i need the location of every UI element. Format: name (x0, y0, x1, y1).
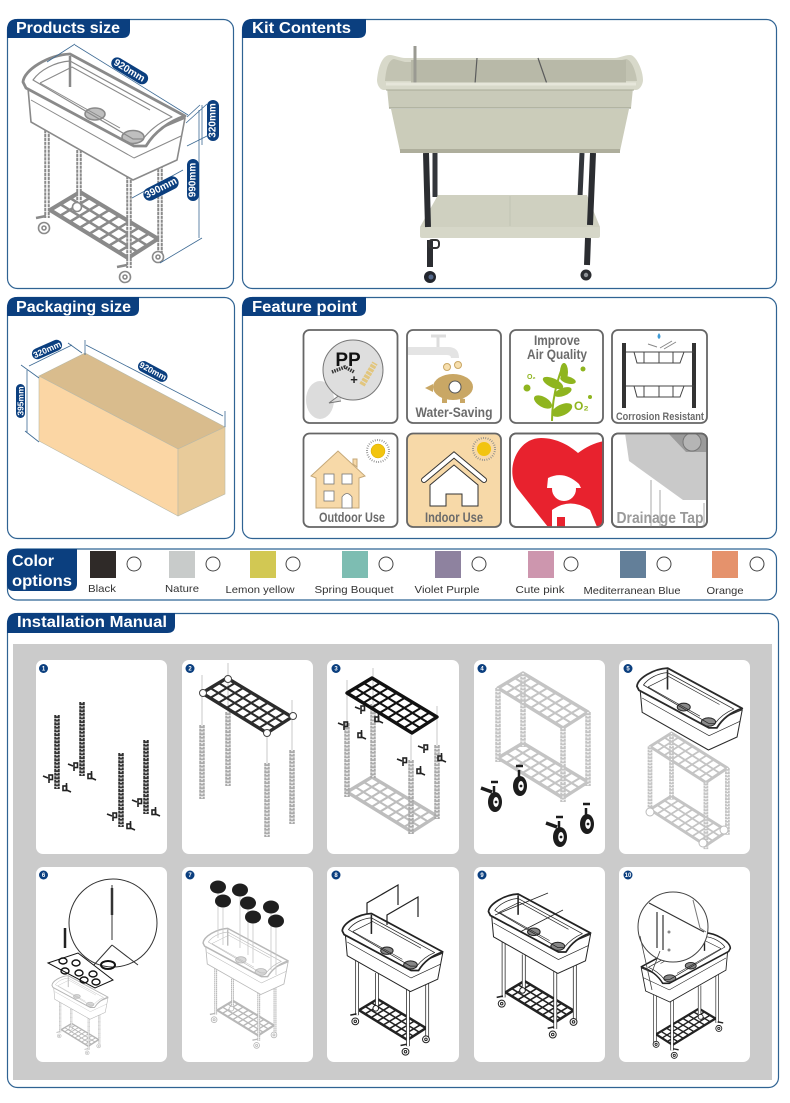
swatch: black (88, 551, 141, 595)
feature icon: PP material (304, 330, 398, 423)
step 2: shelf onto posts (182, 660, 313, 854)
feature icon: heart and gardener (510, 434, 604, 527)
step 1: four posts: 1 (42, 666, 46, 672)
swatch: mediterranean blue: Mediterranean Blue (584, 585, 681, 597)
step 6: gasket sheet (36, 867, 170, 1062)
dimension: 320mm: 320mm (208, 103, 218, 138)
step 5: tub onto rack (619, 660, 750, 854)
swatch: black: Black (88, 583, 117, 595)
step 10: drainage tap detail: 10 (625, 873, 632, 879)
step 8: divider bars (327, 867, 459, 1062)
swatch: orange (706, 551, 764, 597)
magnifier (638, 892, 708, 990)
dimension: 320mm: 320mm (32, 339, 63, 360)
feature icon: corrosion resistant (612, 330, 707, 423)
photo: front legs and wheels (424, 153, 593, 283)
swatch: orange: Orange (706, 585, 744, 597)
step 2: shelf onto posts: 2 (188, 666, 192, 672)
swatch: spring bouquet (314, 551, 394, 596)
heading: products size: Products size (16, 20, 120, 37)
step 3: clips and top shelf: 3 (334, 666, 338, 672)
feature icon: outdoor use (304, 434, 398, 527)
dimension: 920mm: 920mm (138, 360, 169, 382)
step 9: assembled cart (474, 867, 605, 1062)
feature icon: corrosion resistant: Corrosion Resistant (616, 411, 704, 423)
carton box (39, 353, 225, 516)
step 4: attach casters: 4 (480, 666, 484, 672)
dimension: 990mm (160, 110, 202, 263)
feature icon: drainage tap (612, 433, 707, 527)
swatch: cute pink: Cute pink (516, 584, 565, 596)
feature icon: indoor use: Indoor Use (425, 509, 483, 525)
swatch: violet purple (414, 551, 486, 596)
panel: installation manual (7, 613, 778, 1088)
heading: color options: Color (12, 553, 54, 570)
feature icon: PP material: + (350, 372, 358, 387)
dimension: 920mm (85, 340, 225, 427)
dimension: 395mm: 395mm (16, 386, 26, 416)
heading: feature point: Feature point (252, 299, 357, 316)
feature icon: drainage tap: Drainage Tap (616, 510, 704, 527)
feature icon: water saving (407, 330, 501, 423)
feature icon: improve air quality: Improve (534, 332, 580, 348)
step 6: gasket sheet: 6 (42, 873, 46, 879)
step 3: clips and top shelf (327, 660, 459, 854)
swatch: lemon yellow (226, 551, 300, 596)
swatch: cute pink (516, 551, 578, 596)
heading: color options (7, 549, 77, 591)
swatch: violet purple: Violet Purple (414, 584, 480, 596)
feature icon: outdoor use: Outdoor Use (319, 509, 385, 525)
dimension: 920mm: 920mm (111, 57, 147, 85)
product photo: grey planter cart (377, 46, 643, 283)
swatch: lemon yellow: Lemon yellow (226, 584, 295, 596)
dimension: 320mm (186, 100, 219, 146)
step 9: assembled cart: 9 (480, 873, 484, 879)
dimension: 320mm (21, 338, 82, 378)
feature icon: improve air quality (510, 330, 603, 423)
heading: color options: options (12, 573, 72, 590)
panel: feature point (242, 297, 776, 538)
step 5: tub onto rack: 5 (626, 666, 630, 672)
magnifier (68, 878, 158, 970)
feature icon: indoor use (407, 434, 501, 527)
swatch: spring bouquet: Spring Bouquet (314, 584, 394, 596)
step 7: pots: 7 (188, 873, 192, 879)
feature icon: PP material: PP (335, 350, 361, 371)
heading: kit contents (242, 19, 366, 38)
panel: packaging size (7, 297, 234, 538)
feature icon: water saving: Water-Saving (416, 404, 492, 420)
heading: installation manual: Installation Manual (17, 614, 167, 631)
heading: packaging size: Packaging size (16, 299, 131, 316)
feature icon: improve air quality: O₂ (574, 399, 589, 413)
dimension: 390mm: 390mm (143, 176, 179, 201)
grey step background (13, 644, 772, 1080)
panel: products size (7, 19, 234, 288)
dimension: 920mm (47, 44, 200, 117)
panel: color options (7, 549, 776, 600)
feature icon: improve air quality: Air Quality (527, 346, 587, 362)
heading: kit contents: Kit Contents (252, 20, 351, 37)
photo: lower shelf (420, 195, 600, 238)
step 7: pots (182, 867, 313, 1062)
step 4: attach casters (474, 660, 605, 854)
swatch: mediterranean blue (584, 551, 681, 597)
dimension: 990mm: 990mm (188, 163, 198, 197)
photo: tub (377, 46, 643, 153)
swatch: nature (165, 551, 220, 595)
feature icon: improve air quality: O₂ (527, 374, 536, 381)
swatch: nature: Nature (165, 583, 199, 595)
dimension: 390mm (132, 170, 183, 203)
panel: kit contents (242, 19, 776, 288)
photo: rear legs (435, 153, 582, 197)
product dimension drawing (23, 54, 185, 282)
step 10: drainage tap detail (619, 867, 750, 1062)
step 8: divider bars: 8 (334, 873, 338, 879)
dimension: 395mm (16, 370, 39, 442)
step 1: four posts (36, 660, 167, 854)
